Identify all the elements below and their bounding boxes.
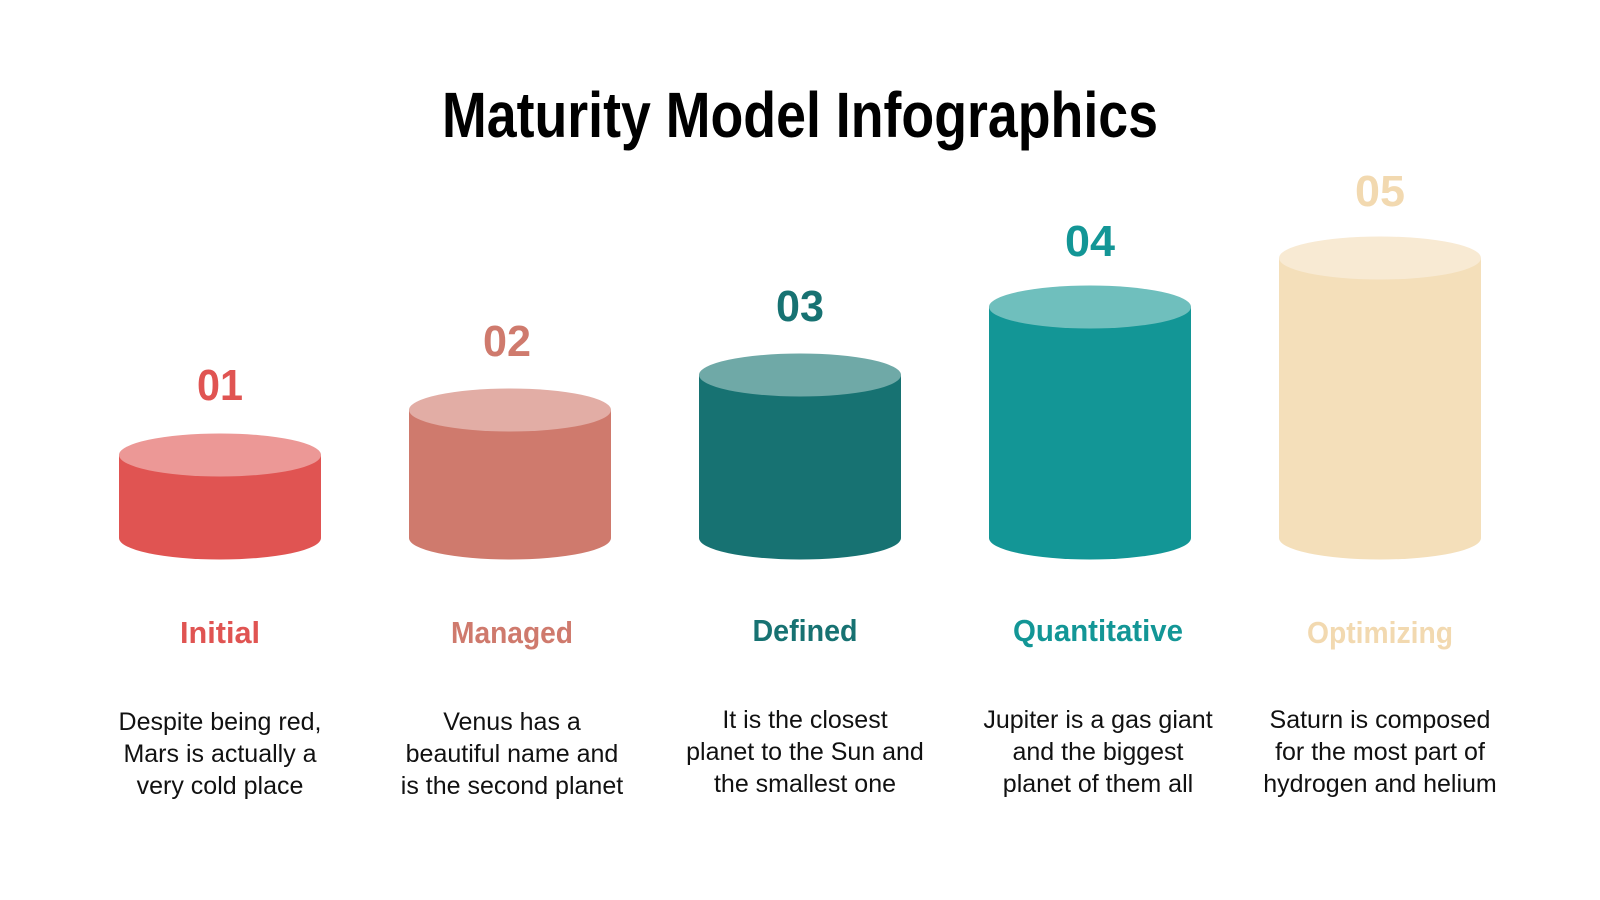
label Quantitative: Quantitative xyxy=(1013,613,1183,648)
description 05: Saturn is composed xyxy=(1270,706,1490,734)
description 04: and the biggest xyxy=(1013,738,1184,766)
number 03: 03 xyxy=(776,282,824,331)
description 04: Jupiter is a gas giant xyxy=(983,706,1213,734)
cylinder 03 xyxy=(699,354,901,559)
description 03: the smallest one xyxy=(714,770,896,798)
description 05: for the most part of xyxy=(1275,738,1485,766)
step 03 xyxy=(686,282,924,798)
label Managed: Managed xyxy=(451,615,573,650)
description 01: very cold place xyxy=(137,772,303,800)
description 02: Venus has a xyxy=(443,708,581,736)
number 04: 04 xyxy=(1065,217,1116,266)
description 05: hydrogen and helium xyxy=(1263,770,1497,798)
step 01 xyxy=(119,361,321,800)
number 02: 02 xyxy=(483,317,531,366)
description 01: Despite being red, xyxy=(119,708,321,736)
description 03: It is the closest xyxy=(722,706,888,734)
number 05: 05 xyxy=(1355,167,1405,216)
cylinder 01 xyxy=(119,434,321,560)
cylinder 05 xyxy=(1279,236,1481,560)
label Optimizing: Optimizing xyxy=(1307,615,1453,650)
description 03: planet to the Sun and xyxy=(686,738,924,766)
description 02: beautiful name and xyxy=(406,740,618,768)
step 04 xyxy=(983,217,1213,798)
step 05 xyxy=(1263,167,1497,798)
description 02: is the second planet xyxy=(401,772,623,800)
number 01: 01 xyxy=(197,361,243,410)
cylinder 04 xyxy=(989,286,1191,560)
cylinder 02 xyxy=(409,388,611,560)
description 04: planet of them all xyxy=(1003,770,1193,798)
description 01: Mars is actually a xyxy=(123,740,317,768)
label Initial: Initial xyxy=(180,615,260,650)
step 02 xyxy=(401,317,623,800)
label Defined: Defined xyxy=(752,613,858,648)
title: Maturity Model Infographics xyxy=(442,79,1158,151)
